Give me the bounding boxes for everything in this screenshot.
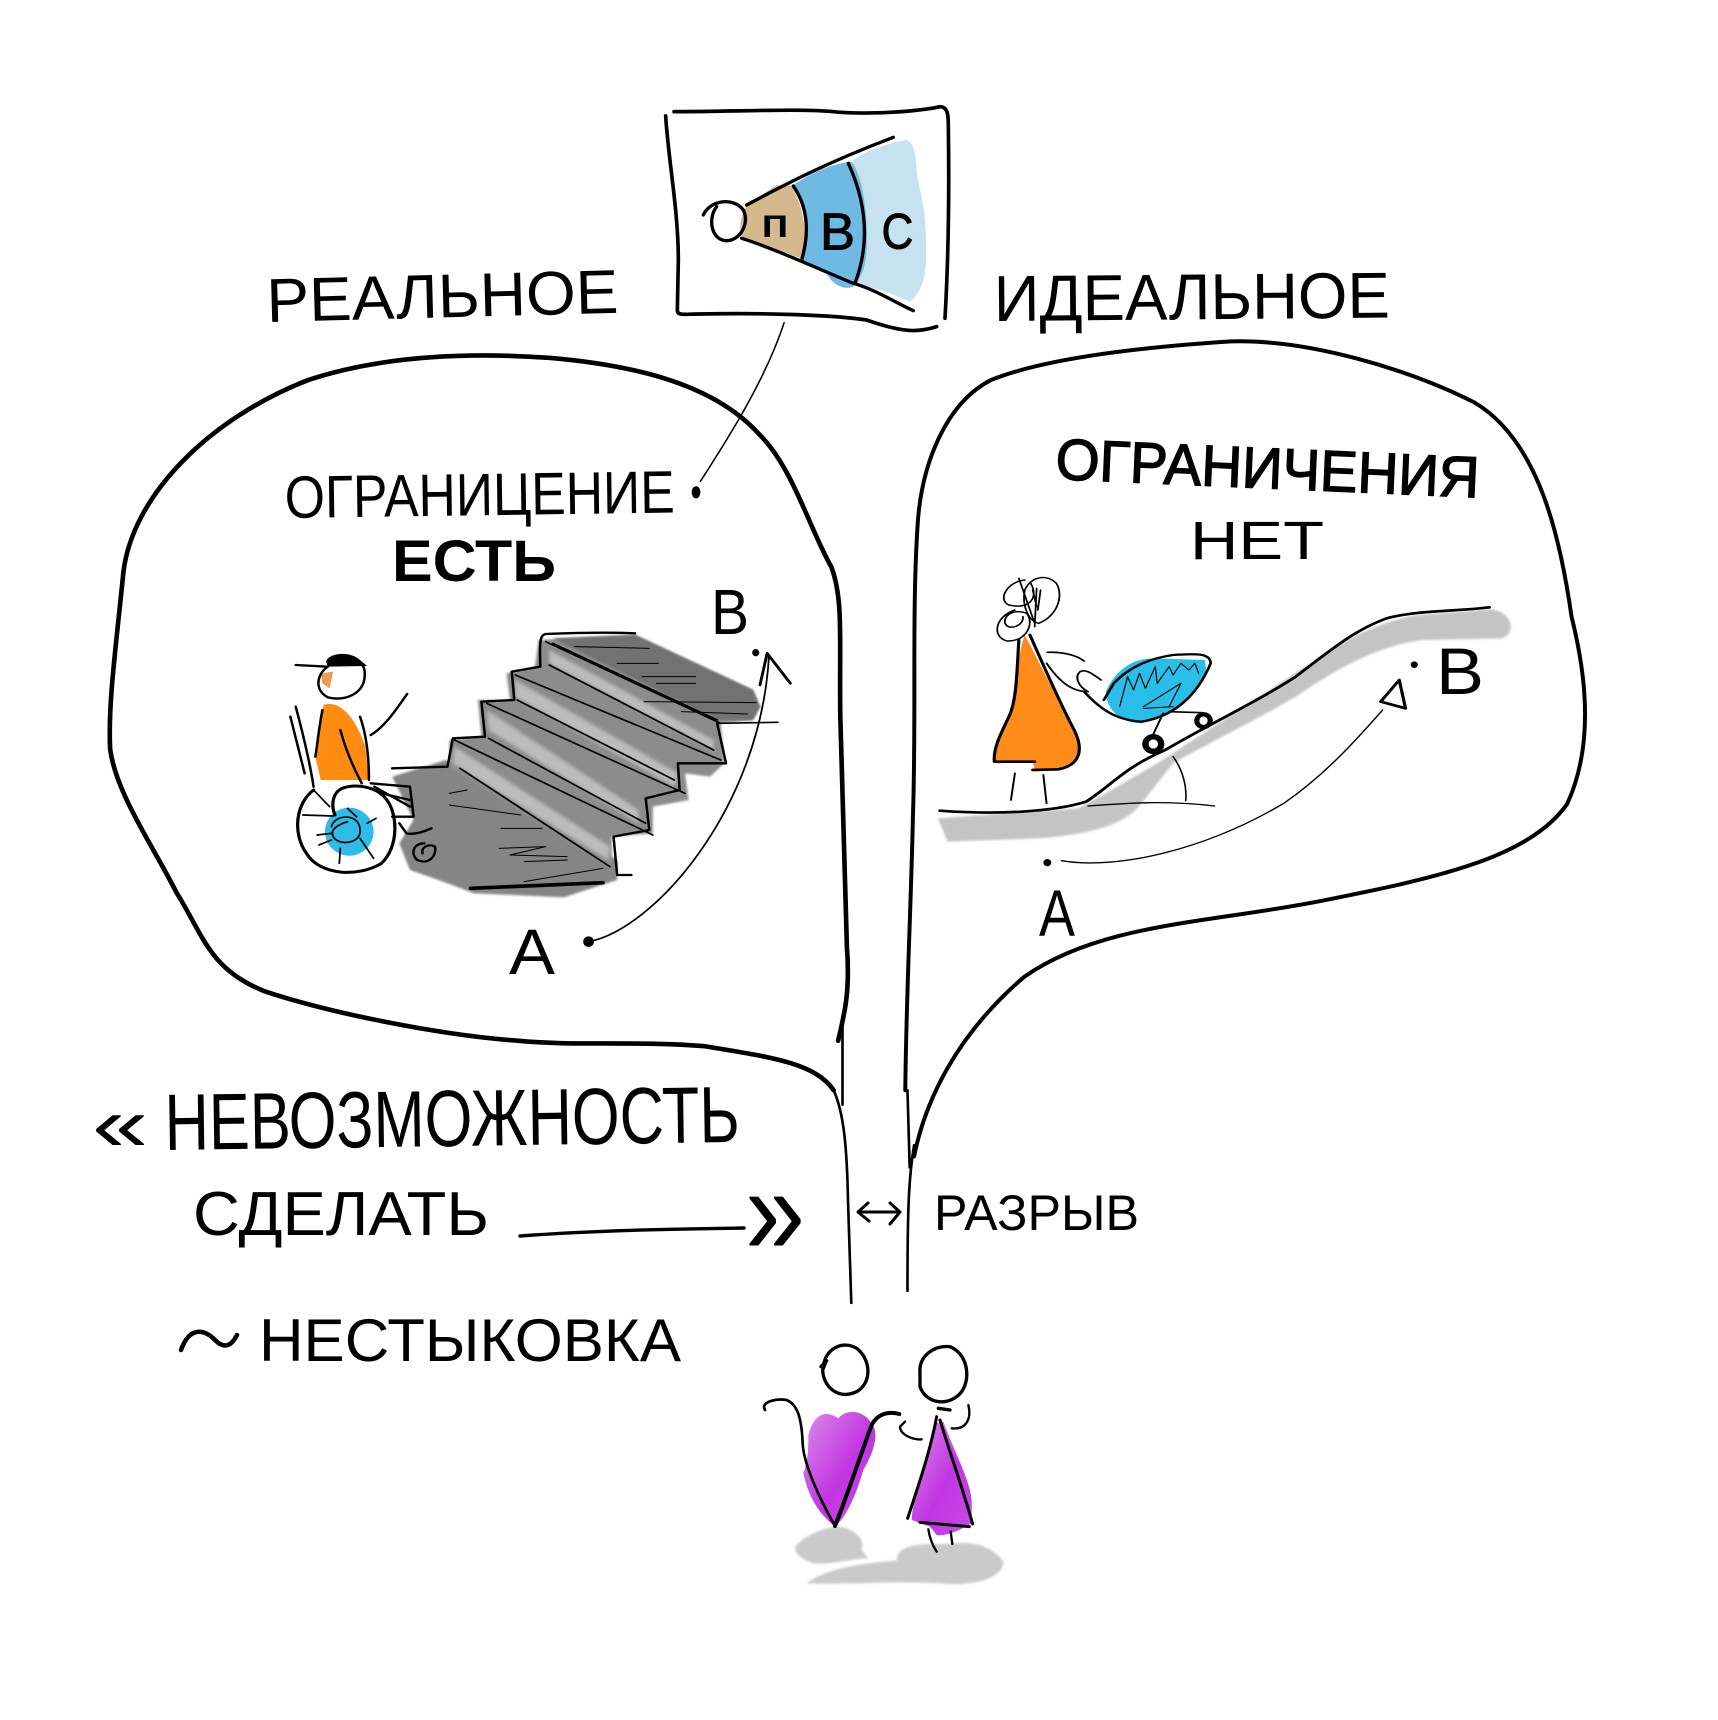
route arrow [1062, 710, 1383, 863]
dress lines [994, 635, 1079, 770]
arrow: gap [858, 1203, 900, 1224]
right person clothing [912, 1422, 972, 1535]
body [315, 704, 369, 780]
illustration: two people talking [764, 1345, 1003, 1584]
label A right: А [1039, 876, 1075, 950]
illustration: woman with stroller [994, 578, 1211, 803]
stair hatching [449, 647, 756, 882]
opening quote: « [92, 1082, 148, 1167]
line two: СДЕЛАТЬ [193, 1180, 489, 1249]
label A left: А [509, 916, 555, 988]
lit risers [453, 650, 714, 860]
label B left: В [711, 576, 749, 648]
callout line from limitation to frame [692, 323, 784, 498]
stair bottom edge [471, 883, 603, 888]
text: no limitation: ОГРАНИЧЕНИЯ [1054, 427, 1481, 510]
stroller fill [1106, 658, 1207, 723]
slope line [940, 607, 1489, 813]
text: none: НЕТ [1190, 511, 1324, 571]
closing quote: » [745, 1142, 805, 1281]
text: limitation exists: ОГРАНИЦЕНИЕ [284, 459, 675, 531]
floor shadow [392, 760, 617, 897]
stair outlines [392, 633, 726, 875]
text: exists: ЕСТЬ [392, 529, 556, 594]
panel: ideal world speech bubble [905, 341, 1585, 1291]
wheel hub [325, 808, 374, 856]
dress [995, 635, 1079, 770]
heading: real: РЕАЛЬНОЕ [266, 258, 619, 336]
angle [1088, 757, 1215, 806]
spokes [303, 790, 376, 863]
cone colour: tan [740, 185, 805, 258]
text: impossibility to do [92, 1070, 805, 1281]
stair nosing lines [455, 642, 721, 867]
line one: НЕВОЗМОЖНОСТЬ [164, 1070, 740, 1167]
illustration: staircase [392, 633, 790, 947]
letter s: С [882, 203, 913, 259]
ground shadows [795, 1527, 1003, 1584]
wheel [298, 786, 395, 872]
tilde [181, 1332, 237, 1350]
illustration: wheelchair user [290, 654, 435, 872]
arrow head [760, 653, 790, 685]
right person lines [920, 1347, 967, 1410]
illustration: slope with shadow [938, 607, 1511, 866]
panel: real world speech bubble [110, 355, 851, 1303]
hair and head [997, 578, 1059, 641]
letter p: п [762, 202, 788, 246]
steps fill [449, 635, 760, 870]
footrest [371, 783, 435, 861]
landing darker [553, 635, 760, 720]
wheels [1151, 712, 1203, 738]
head and cone lines [703, 137, 913, 311]
points [583, 936, 594, 947]
heading: ideal: ИДЕАЛЬНОЕ [993, 259, 1390, 335]
frame outline [666, 107, 949, 331]
text: mismatch [181, 1307, 681, 1374]
person lines [290, 663, 407, 787]
blank underline [520, 1228, 744, 1236]
hat fill [326, 654, 367, 667]
arrow head [1381, 680, 1406, 708]
ear [321, 672, 333, 688]
label B right: В [1436, 634, 1484, 708]
stroller hatching [1120, 663, 1199, 708]
letter v: В [820, 202, 855, 260]
arm and handle [1047, 652, 1101, 692]
text: gap: РАЗРЫВ [934, 1185, 1139, 1241]
cone colour: light blue [853, 140, 926, 302]
word: НЕСТЫКОВКА [259, 1307, 681, 1374]
left person lines [821, 1345, 868, 1394]
legs [1011, 773, 1047, 803]
diagram: perception cone in frame [666, 107, 949, 331]
dots [1043, 859, 1051, 866]
cone colour: mid blue [793, 162, 867, 288]
left person clothing [803, 1412, 875, 1527]
stroller lines [1084, 654, 1211, 722]
ground shadow [938, 609, 1511, 842]
route arrow A to B [589, 657, 778, 942]
